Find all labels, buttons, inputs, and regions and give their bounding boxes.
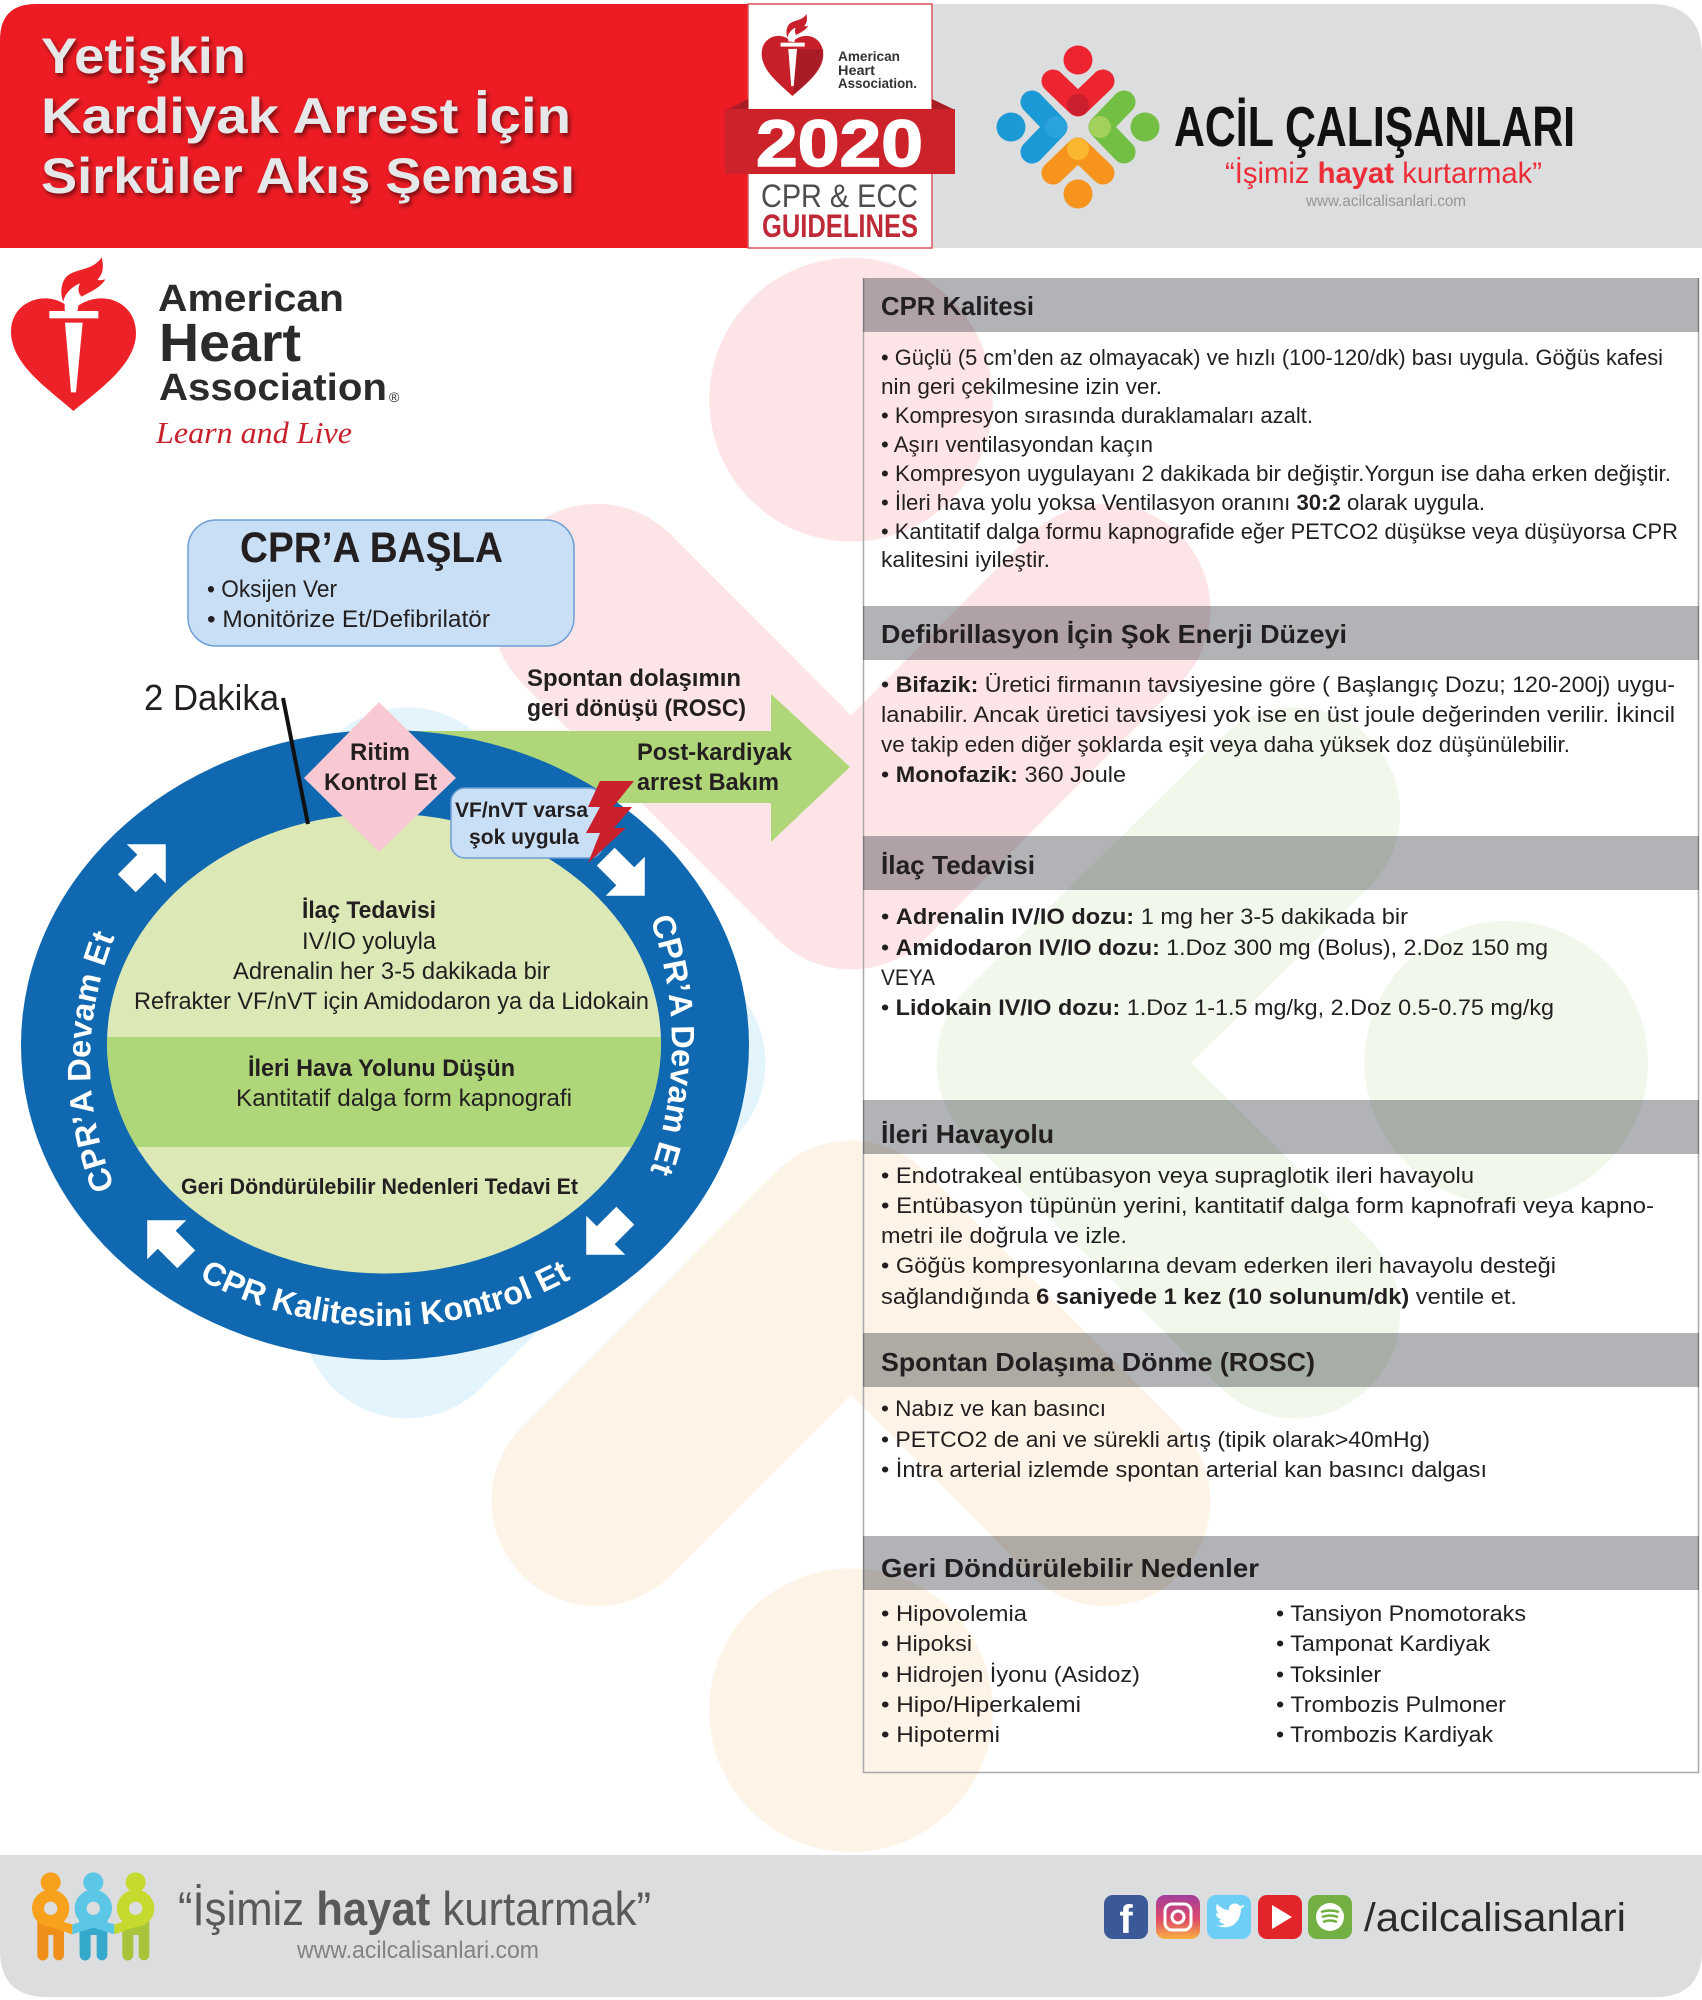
heading: [863, 1333, 1699, 1387]
figure: green: [114, 1872, 149, 1960]
header banner: [0, 4, 1702, 248]
icon: youtube: [1258, 1895, 1302, 1939]
figure: blue: [72, 1872, 114, 1960]
right list: • Trombozis Pulmoner: [1276, 1692, 1506, 1717]
left list: • Hipovolemia: [881, 1601, 1028, 1626]
icon: acil calisanlari logo: [996, 46, 1160, 208]
panel: ilac tedavisi: [863, 836, 1699, 1020]
wordmark: Association: [159, 367, 387, 409]
mini association wordmark: Heart: [838, 62, 875, 78]
curved ring labels: CPR’A Devam Et: [650, 916, 694, 1176]
shock box: şok uygula: [469, 826, 579, 849]
brand url: www.acilcalisanlari.com: [1305, 193, 1466, 210]
american heart association logo: [11, 257, 400, 450]
text block: drug therapy: IV/IO yoluyla: [302, 928, 437, 955]
text block: drug therapy: [134, 897, 649, 1015]
footer slogan: “İşimiz hayat kurtarmak”: [178, 1882, 651, 1935]
panel: cpr a basla: [188, 520, 574, 646]
text block: [881, 1163, 1654, 1309]
left list: • Hipotermi: [881, 1722, 1000, 1747]
wordmark: ®: [389, 389, 400, 405]
text block: VEYA: [881, 965, 935, 990]
text block: drug therapy: Adrenalin her 3-5 dakikada bir: [233, 958, 550, 985]
panel: information column: [863, 278, 1699, 1772]
wordmark: [158, 278, 400, 409]
text block: advanced airway: Kantitatif dalga form kapnografi: [236, 1085, 572, 1112]
title: Kardiyak Arrest İçin: [41, 88, 571, 144]
text block: • Bifazik: Üretici firmanın tavsiyesine göre ( Başlangıç Dozu; 120-200j) uygu-: [881, 672, 1675, 697]
arrows on ring: [107, 825, 664, 1279]
text block: [881, 1396, 1487, 1482]
text block: • Entübasyon tüpünün yerini, kantitatif dalga form kapnofrafi veya kapno-: [881, 1193, 1654, 1218]
label: post cardiac: arrest Bakım: [637, 769, 779, 796]
text block: • Lidokain IV/IO dozu: 1.Doz 1-1.5 mg/kg, 2.Doz 0.5-0.75 mg/kg: [881, 995, 1554, 1020]
mini association wordmark: American: [838, 48, 900, 64]
2020 guidelines badge: [725, 4, 955, 248]
heading: CPR’A BAŞLA: [240, 524, 503, 572]
text block: • Monofazik: 360 Joule: [881, 762, 1126, 787]
heading: İlaç Tedavisi: [881, 850, 1035, 880]
heading: [863, 836, 1699, 890]
text block: [881, 672, 1675, 787]
text block: advanced airway: [236, 1055, 572, 1112]
curved ring labels: CPR Kalitesini Kontrol Et: [203, 1262, 571, 1326]
text block: nin geri çekilmesine izin ver.: [881, 374, 1162, 399]
text block: [881, 904, 1554, 1020]
ribbon: [725, 99, 955, 174]
left list: • Hipoksi: [881, 1631, 972, 1656]
inner green field: [107, 814, 661, 1274]
wordmark: American: [158, 278, 344, 320]
guidelines label: GUIDELINES: [762, 208, 918, 244]
label: post cardiac: [637, 739, 793, 796]
text block: • Güçlü (5 cm’den az olmayacak) ve hızlı (100-120/dk) bası uygula. Göğüs kafesi: [881, 345, 1663, 370]
airway band: [100, 1037, 670, 1147]
heading: CPR Kalitesi: [881, 291, 1034, 321]
mini association wordmark: [838, 48, 917, 91]
right list: [1276, 1601, 1526, 1747]
right list: • Toksinler: [1276, 1662, 1381, 1687]
rhythm check diamond: Ritim: [350, 739, 410, 766]
shock box: VF/nVT varsa: [455, 799, 588, 822]
text block: sağlandığında 6 saniyede 1 kez (10 solunum/dk) ventile et.: [881, 1284, 1517, 1309]
icon: three people: [37, 1872, 149, 1960]
footer url: www.acilcalisanlari.com: [296, 1937, 539, 1964]
text block: • Kompresyon sırasında duraklamaları azalt.: [881, 403, 1313, 428]
text block: • Amidodaron IV/IO dozu: 1.Doz 300 mg (Bolus), 2.Doz 150 mg: [881, 935, 1548, 960]
text block: [881, 345, 1678, 572]
text block: advanced airway: İleri Hava Yolunu Düşün: [248, 1055, 515, 1082]
panel: geri dondurulebilir nedenler: [863, 1536, 1699, 1747]
title: [41, 28, 575, 204]
heading: [863, 278, 1699, 332]
icon: twitter: [1207, 1895, 1251, 1939]
curved ring labels: CPR’A Devam Et: [68, 930, 114, 1191]
text block: • Kantitatif dalga formu kapnografide eğer PETCO2 düşükse veya düşüyorsa CPR: [881, 519, 1678, 544]
icon: facebook: [1104, 1895, 1148, 1942]
rhythm check diamond: Kontrol Et: [324, 769, 437, 796]
text block: • Aşırı ventilasyondan kaçın: [881, 432, 1153, 457]
text block: • Göğüs kompresyonlarına devam ederken ileri havayolu desteği: [881, 1253, 1556, 1278]
text block: • Adrenalin IV/IO dozu: 1 mg her 3-5 dakikada bir: [881, 904, 1408, 929]
brand name: ACİL ÇALIŞANLARI: [1174, 95, 1575, 159]
label: rosc: geri dönüşü (ROSC): [527, 695, 746, 722]
text block: drug therapy: İlaç Tedavisi: [302, 897, 436, 924]
heading: Defibrillasyon İçin Şok Enerji Düzeyi: [881, 619, 1347, 649]
heading: Geri Döndürülebilir Nedenler: [881, 1553, 1259, 1583]
label: rosc: [527, 665, 746, 722]
title: Yetişkin: [41, 28, 246, 84]
right list: • Tamponat Kardiyak: [1276, 1631, 1491, 1656]
outer blue ring: [21, 730, 749, 1360]
heading: [863, 1100, 1699, 1154]
wordmark: Heart: [159, 313, 301, 373]
right list: • Tansiyon Pnomotoraks: [1276, 1601, 1526, 1626]
text block: • Nabız ve kan basıncı: [881, 1396, 1106, 1421]
panel: cpr kalitesi: [863, 278, 1699, 572]
label: rosc: Spontan dolaşımın: [527, 665, 741, 692]
title: Sirküler Akış Şeması: [41, 148, 575, 204]
left list: • Hipo/Hiperkalemi: [881, 1692, 1081, 1717]
panel: spontan dolasima donme: [863, 1333, 1699, 1482]
footer band: [0, 1855, 1702, 1997]
figure: orange: [37, 1872, 72, 1960]
panel: defibrilasyon: [863, 606, 1699, 787]
text block: reversible causes: Geri Döndürülebilir Nedenleri Tedavi Et: [181, 1174, 579, 1199]
text block: drug therapy: Refrakter VF/nVT için Amidodaron ya da Lidokain: [134, 988, 649, 1015]
mini association wordmark: Association.: [838, 75, 917, 91]
bullet list: [207, 576, 490, 633]
social handle: /acilcalisanlari: [1364, 1896, 1626, 1940]
arrow: post cardiac care: [400, 694, 850, 842]
brand slogan: “İşimiz hayat kurtarmak”: [1225, 157, 1542, 190]
icon: instagram: [1156, 1895, 1200, 1939]
curved ring labels: [68, 916, 694, 1326]
icon: facebook: f: [1119, 1898, 1133, 1942]
right list: • Trombozis Kardiyak: [1276, 1722, 1494, 1747]
background watermark logo: [54, 258, 1648, 1852]
icon: heart and torch: [11, 257, 136, 411]
cpr ecc label: CPR & ECC: [761, 178, 918, 214]
panel outline: [864, 278, 1698, 1772]
icon: spotify: [1308, 1895, 1352, 1939]
text block: ve takip eden diğer şoklarda eşit veya daha yüksek doz düşünülebilir.: [881, 732, 1570, 757]
left list: • Hidrojen İyonu (Asidoz): [881, 1662, 1140, 1687]
text block: lanabilir. Ancak üretici tavsiyesi yok ise en üst joule değerinden verilir. İkincil: [881, 702, 1675, 727]
text block: kalitesini iyileştir.: [881, 547, 1050, 572]
rhythm check diamond: [304, 702, 456, 852]
text block: • Kompresyon uygulayanı 2 dakikada bir değiştir.Yorgun ise daha erken değiştir.: [881, 461, 1671, 486]
header grey logo band: [933, 4, 1702, 248]
left list: [881, 1601, 1140, 1747]
text block: • İntra arterial izlemde spontan arterial kan basıncı dalgası: [881, 1457, 1487, 1482]
heading: İleri Havayolu: [881, 1119, 1054, 1149]
label: post cardiac: Post-kardiyak: [637, 739, 793, 766]
shock box: [451, 788, 603, 858]
2 dakika line: [283, 698, 308, 824]
bullet list: • Oksijen Ver: [207, 576, 337, 603]
heading: [863, 1536, 1699, 1590]
icon: lightning bolt: [586, 781, 634, 863]
text block: • İleri hava yolu yoksa Ventilasyon oranını 30:2 olarak uygula.: [881, 490, 1485, 515]
bullet list: • Monitörize Et/Defibrilatör: [207, 606, 490, 633]
heading: [863, 606, 1699, 660]
text block: • PETCO2 de ani ve sürekli artış (tipik olarak>40mHg): [881, 1427, 1430, 1452]
year: 2020: [756, 106, 923, 180]
icon: small heart and torch: [762, 14, 823, 96]
circular flow diagram: [21, 665, 850, 1360]
header red title band: [0, 4, 750, 248]
2 dakika label: 2 Dakika: [144, 677, 280, 718]
panel: ileri havayolu: [863, 1100, 1699, 1309]
heading: Spontan Dolaşıma Dönme (ROSC): [881, 1347, 1315, 1377]
text block: • Endotrakeal entübasyon veya supraglotik ileri havayolu: [881, 1163, 1474, 1188]
text block: metri ile doğrula ve izle.: [881, 1223, 1127, 1248]
tagline: Learn and Live: [155, 415, 352, 450]
